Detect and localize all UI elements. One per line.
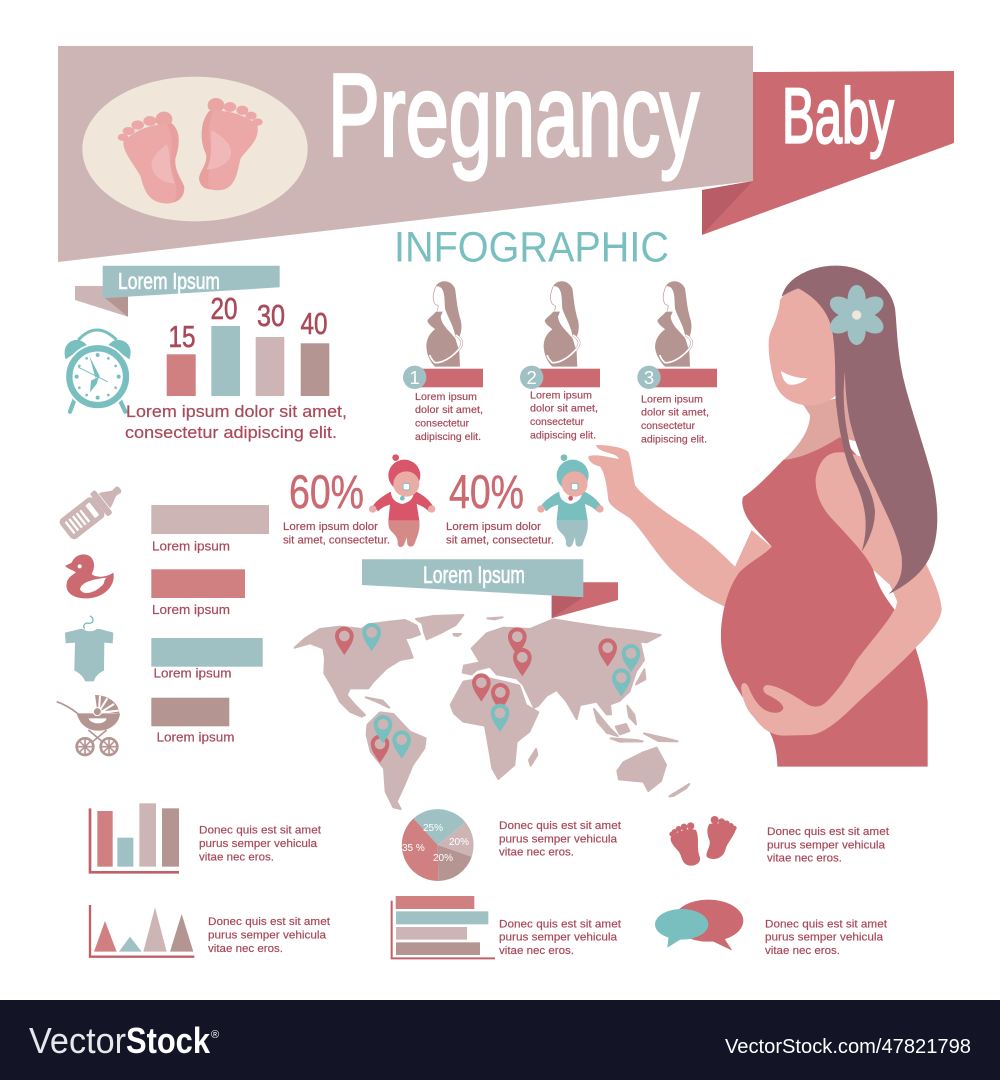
footer: watermark bar: [0, 1000, 1000, 1080]
stage 1: Lorem ipsum: [415, 391, 477, 403]
footer: watermark bar: Stock: [126, 1020, 211, 1061]
bottom: bar chart icon and text: vitae nec eros.: [199, 851, 274, 863]
icon: baby feet in oval: [82, 77, 308, 221]
icon: baby bottle: [56, 477, 129, 543]
bottom: triangle chart icon and text: Donec quis est sit amet: [208, 916, 331, 928]
bar chart: 15 20 30 40: 30: [257, 298, 285, 333]
icon: baby in red: [369, 454, 435, 547]
stage 3: 3: [644, 367, 654, 388]
header banner: Pregnancy: [58, 46, 753, 262]
bottom: speech bubbles icon and text: Donec quis est sit amet: [765, 918, 888, 930]
footer: watermark bar: ®: [211, 1029, 219, 1041]
stage 3: adipiscing elit.: [641, 433, 707, 445]
stage 3: consectetur: [641, 420, 695, 432]
world map with pins: [295, 615, 689, 809]
panel: 40 percent boy baby: [446, 454, 604, 547]
stage 2: [520, 281, 600, 441]
bars and labels: Lorem ipsum: [152, 539, 230, 554]
bottom: pie chart and text: 25%: [423, 823, 443, 834]
stage 2: dolor sit amet,: [530, 403, 598, 415]
bottom: horizontal bars and text: Donec quis est sit amet: [499, 918, 622, 930]
text: chart caption: Lorem ipsum dolor sit amet,: [126, 403, 347, 421]
bottom: pie chart and text: 35 %: [402, 843, 425, 854]
bars and labels: Lorem ipsum: [154, 666, 232, 681]
icon: flower in hair: [826, 285, 887, 345]
title: Pregnancy: Pregnancy: [328, 50, 699, 181]
bottom: speech bubbles icon and text: purus semper vehicula: [765, 932, 884, 944]
header banner: Baby ribbon: [702, 71, 954, 235]
bottom: horizontal bars and text: [392, 896, 622, 958]
ribbon: Lorem Ipsum top left: Lorem Ipsum: [118, 268, 220, 294]
stage 3: [637, 281, 717, 445]
bottom: pie chart and text: vitae nec eros.: [499, 847, 574, 859]
bottom: speech bubbles icon and text: [655, 900, 888, 957]
stage 3: Lorem ipsum: [641, 393, 703, 405]
bar chart: 15 20 30 40: 15: [168, 319, 196, 354]
pins: [335, 623, 640, 763]
bottom: bar chart icon and text: Donec quis est sit amet: [199, 824, 322, 836]
bottom: small feet icon and text: vitae nec eros.: [767, 853, 842, 865]
icon: rubber duck: [65, 554, 114, 598]
bottom: pie chart and text: [402, 809, 622, 881]
bottom: triangle chart icon and text: purus semper vehicula: [208, 930, 327, 942]
panel: 40 percent boy baby: 40%: [449, 465, 524, 518]
stage 2: consectetur: [530, 416, 584, 428]
bars and labels: [151, 505, 269, 745]
bottom: bar chart icon and text: [90, 803, 322, 872]
icon: alarm clock: [64, 330, 131, 412]
stage 3: dolor sit amet,: [641, 407, 709, 419]
bottom: small feet icon and text: [669, 816, 890, 866]
icon: baby onesie: [65, 616, 113, 681]
text: chart caption: [125, 403, 347, 442]
stage 1: 1: [410, 367, 420, 388]
bottom: pie chart and text: 20%: [449, 837, 469, 848]
panel: 60 percent girl baby: sit amet, consectetur.: [283, 534, 390, 546]
bar chart: 15 20 30 40: 40: [300, 306, 328, 341]
bottom: small feet icon and text: purus semper vehicula: [767, 839, 886, 851]
bars and labels: Lorem ipsum: [152, 602, 230, 617]
icon: baby in teal: [537, 454, 604, 547]
panel: baby goods list: [56, 477, 269, 755]
panel: clock bar chart: [64, 266, 347, 442]
stage 2: adipiscing elit.: [530, 429, 596, 441]
bottom: triangle chart icon and text: vitae nec eros.: [208, 943, 283, 955]
stage 1: [403, 281, 483, 443]
panel: 60 percent girl baby: Lorem ipsum dolor: [283, 521, 378, 533]
text: chart caption: consectetur adipiscing elit.: [125, 424, 337, 442]
panel: 60 percent girl baby: 60%: [289, 465, 364, 518]
subtitle: INFOGRAPHIC: INFOGRAPHIC: [394, 224, 669, 272]
bottom: small feet icon and text: Donec quis est sit amet: [767, 826, 890, 838]
stage 2: Lorem ipsum: [530, 389, 592, 401]
bottom: horizontal bars and text: vitae nec eros.: [499, 945, 574, 957]
bottom: pie chart and text: 20%: [433, 853, 453, 864]
stage 1: adipiscing elit.: [415, 431, 481, 443]
panel: 40 percent boy baby: Lorem ipsum dolor: [446, 521, 541, 533]
footer: watermark bar: VectorStock.com/47821798: [725, 1036, 971, 1058]
panel: 40 percent boy baby: sit amet, consectetur.: [446, 534, 554, 546]
footer: watermark bar: Vector: [29, 1020, 126, 1061]
stage 2: 2: [527, 367, 537, 388]
header banner: Baby ribbon: Baby: [782, 72, 894, 160]
ribbon: Lorem Ipsum above map: [362, 559, 618, 618]
bottom: triangle chart icon and text: [90, 905, 331, 957]
bottom: pie chart and text: purus semper vehicula: [499, 833, 618, 845]
panel: three pregnancy stages: [403, 281, 717, 445]
bars and labels: Lorem ipsum: [156, 730, 234, 745]
bottom: horizontal bars and text: purus semper vehicula: [499, 932, 618, 944]
stage 1: consectetur: [415, 418, 469, 430]
stage 1: dolor sit amet,: [415, 404, 483, 416]
illustration: pregnant woman: [588, 266, 942, 767]
bar chart: 15 20 30 40: 20: [210, 291, 238, 326]
icon: baby stroller: [57, 695, 120, 755]
ribbon: Lorem Ipsum above map: Lorem Ipsum: [423, 562, 525, 589]
bottom: speech bubbles icon and text: vitae nec eros.: [765, 945, 840, 957]
ribbon: Lorem Ipsum top left: [75, 266, 280, 317]
panel: 60 percent girl baby: [283, 454, 435, 547]
bottom: bar chart icon and text: purus semper vehicula: [199, 838, 318, 850]
bottom: pie chart and text: Donec quis est sit amet: [499, 820, 622, 832]
bar chart: 15 20 30 40: [167, 291, 329, 396]
